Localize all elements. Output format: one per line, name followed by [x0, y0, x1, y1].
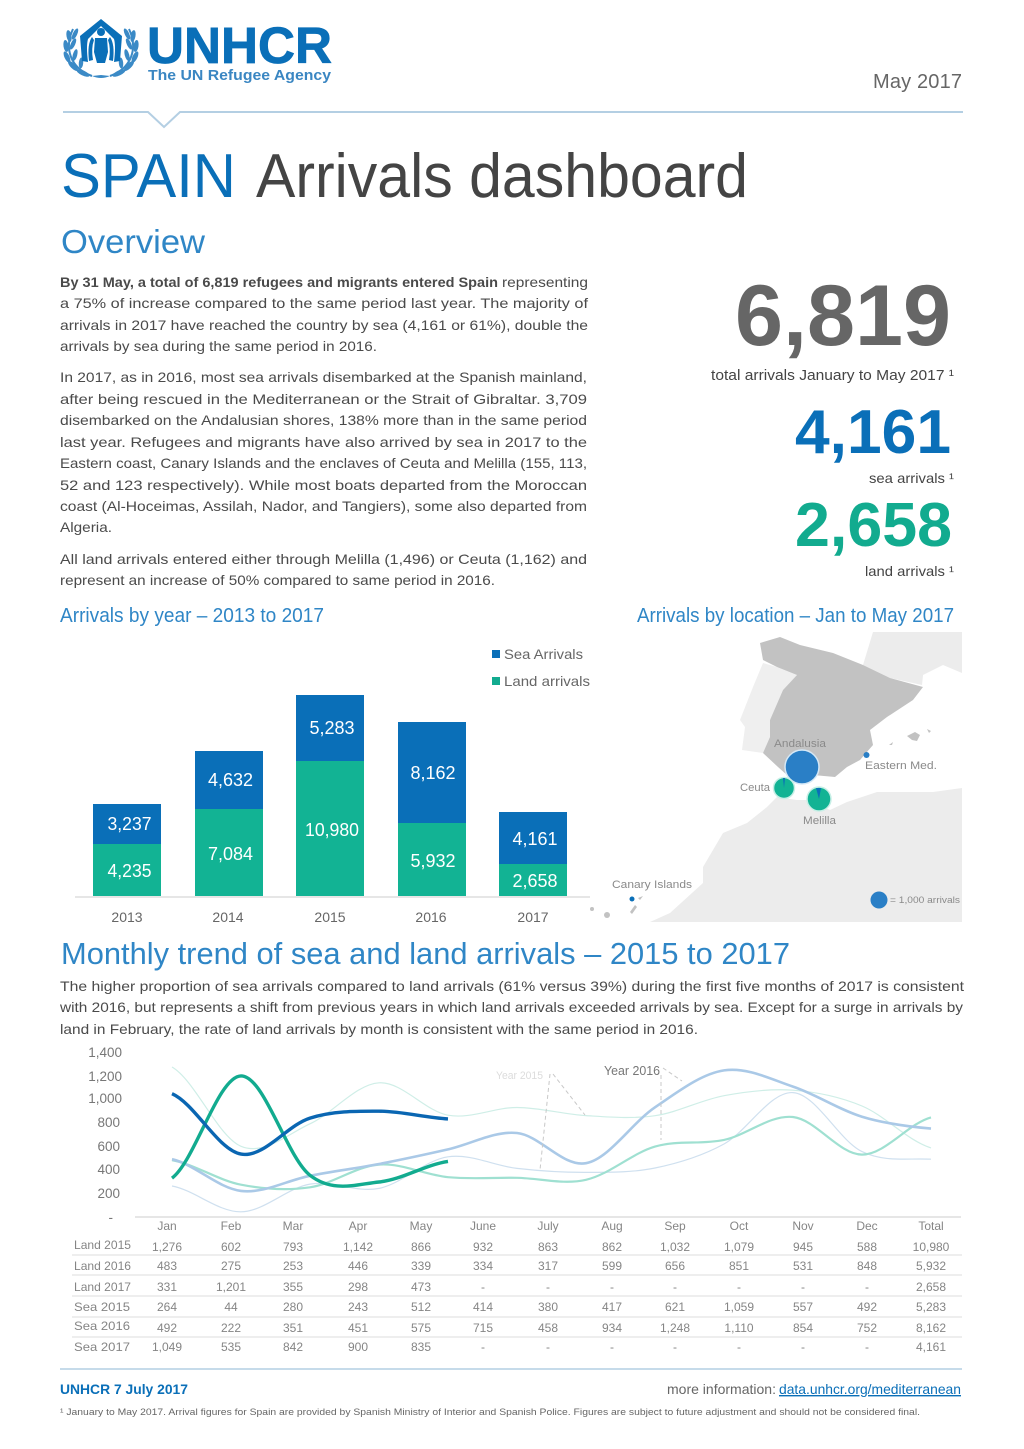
row: Sea 2015: 5,283 — [916, 1300, 946, 1314]
row: Land 2015: 588 — [857, 1240, 877, 1254]
table header: May — [410, 1219, 432, 1233]
sea arrivals: 4,161 — [795, 398, 951, 467]
footer — [60, 1369, 962, 1418]
marker: Eastern Med — [864, 752, 870, 758]
overview text: arrivals in 2017 have reached the country by sea (4,161 or 61%), double the — [60, 317, 588, 333]
row: Land 2017 — [74, 1280, 946, 1294]
row: Land 2015: 863 — [538, 1240, 558, 1254]
y axis labels: 200 — [97, 1186, 120, 1201]
row: Land 2017: - — [673, 1280, 677, 1294]
overview text: By 31 May, a total of 6,819 refugees and migrants entered Spain — [60, 274, 498, 290]
bar values: 4,161 — [512, 829, 558, 849]
map labels: Eastern Med. — [865, 760, 937, 772]
annotation: Year 2016 — [604, 1064, 682, 1140]
table header: Aug — [601, 1219, 623, 1233]
monthly trend text: The higher proportion of sea arrivals compared to land arrivals (61% versus 39%) during the first five months of 2017 is consistent — [60, 978, 964, 994]
marker: Melilla — [807, 787, 831, 811]
map labels: Ceuta — [740, 782, 771, 794]
table header: July — [537, 1219, 559, 1233]
row: Sea 2017: Sea 2017 — [74, 1340, 130, 1354]
table header: Nov — [792, 1219, 814, 1233]
row: Sea 2017: - — [546, 1340, 550, 1354]
row: Sea 2015: 243 — [348, 1300, 368, 1314]
row: Land 2016: 5,932 — [916, 1259, 946, 1273]
overview text: All land arrivals entered either through Melilla (1,496) or Ceuta (1,162) and — [60, 551, 587, 567]
row: Land 2017: - — [546, 1280, 550, 1294]
annotation: Year 2016: Year 2016 — [604, 1064, 660, 1078]
row: Sea 2015: 512 — [411, 1300, 431, 1314]
line: land 2017 — [172, 1076, 448, 1186]
annotation: Year 2015: Year 2015 — [496, 1070, 543, 1082]
row: Sea 2015: Sea 2015 — [74, 1300, 130, 1314]
row: Land 2016: 656 — [665, 1259, 685, 1273]
row: Land 2015: 1,276 — [152, 1240, 182, 1254]
footnote: ¹ January to May 2017. Arrival figures for Spain are provided by Spanish Ministry of Interior and Spanish Police. Figures are subject to future adjustment and should not be considered final. — [60, 1407, 920, 1418]
row: Sea 2015: 621 — [665, 1300, 685, 1314]
land arrivals: 2,658 — [795, 491, 952, 560]
bar values: 5,283 — [310, 718, 354, 738]
row: Land 2016 — [74, 1259, 946, 1273]
table header: Apr — [349, 1219, 367, 1233]
row: Sea 2015: 492 — [857, 1300, 877, 1314]
year axis: 2016 — [415, 909, 447, 925]
row: Sea 2016: 451 — [348, 1321, 368, 1335]
year axis: 2013 — [111, 909, 143, 925]
table header: Jan — [157, 1219, 177, 1233]
row: Land 2015: 793 — [283, 1240, 303, 1254]
marker: Ceuta — [774, 778, 794, 798]
row: Land 2016: 446 — [348, 1259, 368, 1273]
row: Land 2016: 334 — [473, 1259, 493, 1273]
row: Land 2016: 317 — [538, 1259, 558, 1273]
header rule with chevron — [63, 112, 963, 127]
row: Land 2015: 1,079 — [724, 1240, 754, 1254]
row: Sea 2015: 44 — [224, 1300, 238, 1314]
row: Land 2015 — [74, 1238, 950, 1254]
row: Land 2017: 473 — [411, 1280, 431, 1294]
overview text: representing — [502, 274, 588, 290]
year axis — [111, 909, 549, 925]
land arrivals: land arrivals ¹ — [865, 563, 954, 579]
row: Sea 2017: - — [865, 1340, 869, 1354]
overview text: represent an increase of 50% compared to same period in 2016. — [60, 572, 495, 588]
line: land 2015 — [172, 1067, 931, 1149]
row: Sea 2016: 575 — [411, 1321, 431, 1335]
row: Sea 2016: 222 — [221, 1321, 241, 1335]
line: land 2016 — [172, 1117, 931, 1189]
row: Land 2017: - — [801, 1280, 805, 1294]
bar values: 3,237 — [108, 814, 152, 834]
overview text: after being rescued in the Mediterranean or the Strait of Gibraltar. 3,709 — [60, 391, 587, 407]
row: Land 2017: 298 — [348, 1280, 368, 1294]
row: Land 2016: 339 — [411, 1259, 431, 1273]
row: Land 2016: 599 — [602, 1259, 622, 1273]
marker: Canary Islands — [630, 896, 634, 902]
bar values: 4,632 — [208, 770, 253, 790]
marker: Andalusia — [785, 750, 819, 784]
line: sea 2017 — [172, 1094, 448, 1154]
row: Sea 2015 — [74, 1300, 946, 1314]
row: Sea 2015: 557 — [793, 1300, 813, 1314]
row: Sea 2017: - — [673, 1340, 677, 1354]
overview text — [60, 274, 588, 588]
row: Sea 2016: 8,162 — [916, 1321, 946, 1335]
row: Land 2015: 10,980 — [913, 1240, 950, 1254]
row: Sea 2016: 1,110 — [724, 1321, 754, 1335]
map legend: = 1,000 arrivals — [890, 895, 960, 906]
year axis: 2014 — [212, 909, 244, 925]
sea arrivals: sea arrivals ¹ — [869, 470, 954, 486]
row: Land 2016: 531 — [793, 1259, 813, 1273]
row: Sea 2017: - — [481, 1340, 485, 1354]
y axis labels: 600 — [97, 1139, 120, 1154]
row: Land 2017: - — [737, 1280, 741, 1294]
row: Land 2016: 483 — [157, 1259, 177, 1273]
heading: Overview: Overview — [61, 223, 205, 260]
bar chart: arrivals by year — [75, 646, 590, 925]
table header — [157, 1219, 944, 1233]
date: May 2017 — [873, 71, 962, 93]
map: arrivals by location — [590, 632, 962, 922]
y axis labels: 1,200 — [88, 1069, 122, 1084]
row: Sea 2016: 1,248 — [660, 1321, 690, 1335]
legend: Sea Arrivals — [504, 646, 583, 662]
row: Land 2015: Land 2015 — [74, 1238, 131, 1252]
y axis labels: 1,000 — [88, 1091, 122, 1106]
overview text: coast (Al-Hoceimas, Assilah, Nador, and Tangiers), some also departed from — [60, 498, 587, 514]
monthly trend text: land in February, the rate of land arrivals by month is consistent with the same period in 2016. — [60, 1021, 698, 1037]
row: Land 2016: 851 — [729, 1259, 749, 1273]
heading: arrivals by year: Arrivals by year – 2013 to 2017 — [60, 605, 324, 627]
row: Land 2017: 1,201 — [216, 1280, 246, 1294]
row: Land 2016: Land 2016 — [74, 1259, 131, 1273]
key figures — [711, 268, 954, 579]
bar values: 2,658 — [512, 871, 558, 891]
row: Sea 2015: 417 — [602, 1300, 622, 1314]
UNHCR logo — [62, 17, 332, 84]
legend — [492, 646, 590, 689]
table header: Total — [918, 1219, 944, 1233]
table header: Feb — [221, 1219, 242, 1233]
table header: Oct — [730, 1219, 749, 1233]
table header: June — [470, 1219, 496, 1233]
bar values: 5,932 — [410, 851, 456, 871]
title: Arrivals dashboard — [256, 142, 748, 211]
row: Sea 2016 — [74, 1319, 946, 1335]
row: Land 2017: 355 — [283, 1280, 303, 1294]
map labels — [612, 738, 937, 891]
row: Land 2017: - — [865, 1280, 869, 1294]
overview text: a 75% of increase compared to the same period last year. The majority of — [60, 295, 588, 311]
row: Sea 2015: 1,059 — [724, 1300, 754, 1314]
map legend — [870, 892, 960, 908]
row: Sea 2017 — [74, 1340, 946, 1354]
footer link: more information: — [667, 1381, 776, 1397]
total arrivals: 6,819 — [735, 268, 951, 364]
bar values: 4,235 — [108, 861, 152, 881]
row: Sea 2017: 842 — [283, 1340, 303, 1354]
row: Land 2017: - — [610, 1280, 614, 1294]
map labels: Melilla — [803, 815, 837, 827]
row: Land 2015: 1,032 — [660, 1240, 690, 1254]
row: Sea 2015: 264 — [157, 1300, 177, 1314]
row: Sea 2017: 900 — [348, 1340, 368, 1354]
row: Sea 2016: 752 — [857, 1321, 877, 1335]
row: Land 2016: 848 — [857, 1259, 877, 1273]
row: Land 2017: 331 — [157, 1280, 177, 1294]
row: Sea 2015: 414 — [473, 1300, 493, 1314]
row: Land 2015: 932 — [473, 1240, 493, 1254]
overview text: Algeria. — [60, 519, 112, 535]
monthly trend text: with 2016, but represents a shift from previous years in which land arrivals exceeded arrivals by sea. Except for a surge in arrivals by — [59, 999, 963, 1015]
y axis labels: - — [108, 1210, 113, 1225]
footer source: UNHCR 7 July 2017 — [60, 1381, 188, 1397]
footer link: data.unhcr.org/mediterranean — [779, 1381, 961, 1397]
row: Sea 2017: - — [801, 1340, 805, 1354]
row: Land 2015: 862 — [602, 1240, 622, 1254]
y axis labels: 1,400 — [88, 1045, 122, 1060]
year axis: 2017 — [517, 909, 549, 925]
row: Sea 2015: 380 — [538, 1300, 558, 1314]
data table — [72, 1219, 962, 1354]
row: Sea 2016: 458 — [538, 1321, 558, 1335]
map: Spain — [760, 637, 923, 777]
table header: Dec — [856, 1219, 878, 1233]
row: Sea 2017: - — [610, 1340, 614, 1354]
row: Sea 2017: 835 — [411, 1340, 431, 1354]
row: Land 2017: - — [481, 1280, 485, 1294]
bar values — [108, 718, 558, 891]
row: Sea 2016: 715 — [473, 1321, 493, 1335]
title — [61, 142, 748, 211]
overview text: last year. Refugees and migrants have also arrived by sea in 2017 to the — [60, 434, 587, 450]
row: Land 2017: Land 2017 — [74, 1280, 131, 1294]
wordmark: UNHCR — [147, 17, 332, 74]
icon: UNHCR emblem — [62, 28, 140, 78]
overview text: 52 and 123 respectively). While most boats departed from the Moroccan — [60, 477, 587, 493]
bar values: 8,162 — [410, 763, 456, 783]
total arrivals: total arrivals January to May 2017 ¹ — [711, 367, 954, 384]
heading: arrivals by location: Arrivals by location – Jan to May 2017 — [637, 605, 954, 627]
row: Land 2015: 1,142 — [343, 1240, 373, 1254]
bar values: 7,084 — [208, 844, 253, 864]
heading: monthly trend: Monthly trend of sea and land arrivals – 2015 to 2017 — [61, 936, 790, 971]
row: Land 2015: 866 — [411, 1240, 431, 1254]
row: Land 2017: 2,658 — [916, 1280, 946, 1294]
line: sea 2015 — [172, 1093, 931, 1212]
row: Sea 2017: 1,049 — [152, 1340, 182, 1354]
row: Land 2016: 253 — [283, 1259, 303, 1273]
y axis labels — [88, 1045, 122, 1225]
table header: Mar — [283, 1219, 303, 1233]
row: Sea 2016: 492 — [157, 1321, 177, 1335]
y axis labels: 800 — [97, 1115, 120, 1130]
line: sea 2016 — [172, 1070, 931, 1191]
overview text: Eastern coast, Canary Islands and the enclaves of Ceuta and Melilla (155, 113, — [60, 455, 587, 471]
legend: Land arrivals — [504, 673, 590, 689]
row: Sea 2017: 535 — [221, 1340, 241, 1354]
map labels: Andalusia — [774, 738, 827, 750]
overview text: arrivals by sea during the same period in 2016. — [60, 338, 377, 354]
row: Sea 2016: Sea 2016 — [74, 1319, 130, 1333]
row: Sea 2017: 4,161 — [916, 1340, 946, 1354]
overview text: In 2017, as in 2016, most sea arrivals disembarked at the Spanish mainland, — [60, 369, 587, 385]
overview text: disembarked on the Andalusian shores, 138% more than in the same period — [60, 412, 587, 428]
tagline: The UN Refugee Agency — [148, 67, 332, 84]
year axis: 2015 — [314, 909, 346, 925]
table header: Sep — [664, 1219, 686, 1233]
row: Land 2015: 945 — [793, 1240, 813, 1254]
row: Sea 2016: 854 — [793, 1321, 813, 1335]
bar values: 10,980 — [305, 820, 359, 840]
row: Sea 2017: - — [737, 1340, 741, 1354]
monthly trend text — [59, 978, 964, 1037]
row: Sea 2016: 351 — [283, 1321, 303, 1335]
annotation: Year 2015 — [496, 1070, 585, 1170]
map base: France, Portugal, North Africa — [650, 632, 962, 922]
map: islands — [590, 729, 931, 918]
title: SPAIN — [61, 142, 236, 211]
bars — [93, 695, 567, 896]
row: Sea 2016: 934 — [602, 1321, 622, 1335]
line chart: monthly arrivals — [88, 1045, 961, 1225]
row: Land 2015: 602 — [221, 1240, 241, 1254]
row: Land 2016: 275 — [221, 1259, 241, 1273]
map labels: Canary Islands — [612, 879, 693, 891]
y axis labels: 400 — [97, 1162, 120, 1177]
footer link — [667, 1381, 961, 1397]
row: Sea 2015: 280 — [283, 1300, 303, 1314]
